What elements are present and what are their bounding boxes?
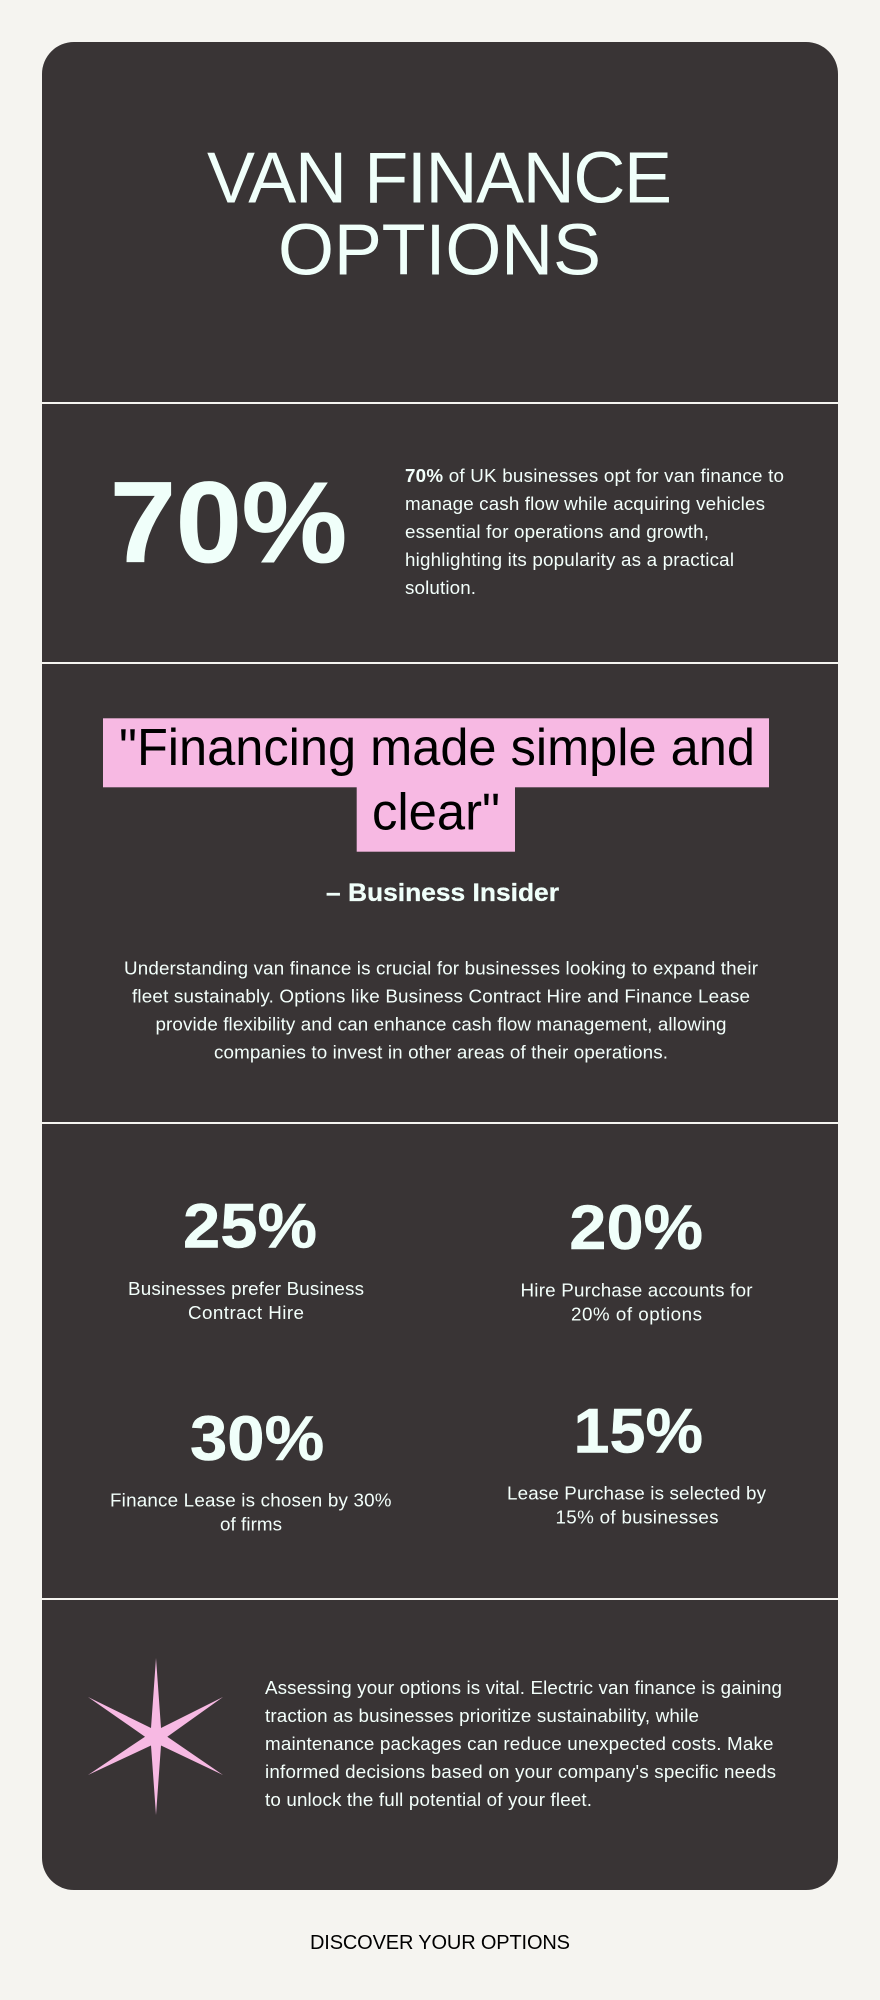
title — [207, 138, 672, 290]
text block: 70% description — [405, 465, 784, 598]
stat: 25%: Businesses prefer Business — [128, 1278, 364, 1299]
title: VAN FINANCE — [207, 138, 672, 218]
text block: understanding van finance: provide flexibility and can enhance cash flow management, allowing — [156, 1013, 726, 1034]
big stat: 70%: 70% — [110, 459, 347, 587]
text block: 70% description: solution. — [405, 577, 476, 598]
stat: 15%: Lease Purchase is selected by — [507, 1482, 767, 1504]
text block: assessing your options: maintenance packages can reduce unexpected costs. Make — [265, 1733, 774, 1754]
text block: assessing your options: to unlock the full potential of your fleet. — [265, 1789, 592, 1810]
text block: 70% description: essential for operations and growth, — [405, 521, 709, 542]
stat: 30%: 30% — [190, 1404, 324, 1474]
text block: understanding van finance: companies to invest in other areas of their operations. — [214, 1041, 668, 1062]
quote with pink highlight: "Financing made simple and — [119, 719, 755, 777]
text block: 70% description: highlighting its popularity as a practical — [405, 549, 734, 570]
text block: 70% description: manage cash flow while acquiring vehicles — [405, 493, 765, 514]
stat: 20% — [520, 1193, 752, 1324]
stat: 15%: 15% — [574, 1396, 703, 1466]
stat: 15%: 15% of businesses — [556, 1506, 718, 1528]
text block: assessing your options: informed decisions based on your company's specific needs — [265, 1761, 776, 1782]
quote source: – Business Insider — [326, 879, 559, 907]
stat: 30%: Finance Lease is chosen by 30% — [110, 1490, 392, 1510]
text block: assessing your options: Assessing your options is vital. Electric van finance is gaining — [265, 1677, 782, 1698]
stat: 25%: 25% — [183, 1192, 317, 1262]
text block: 70% description: 70% of UK businesses opt for van finance to — [405, 465, 784, 486]
stat: 25% — [128, 1192, 364, 1323]
icon: pink six-point star — [88, 1658, 223, 1815]
stat: 20%: Hire Purchase accounts for — [520, 1280, 752, 1300]
text block: understanding van finance: fleet sustainably. Options like Business Contract Hire and Finance Lease — [132, 985, 750, 1006]
stat: 25%: Contract Hire — [188, 1302, 304, 1323]
text block: understanding van finance — [124, 957, 758, 1062]
text block: assessing your options: traction as businesses prioritize sustainability, while — [265, 1705, 699, 1726]
quote with pink highlight: clear" — [372, 784, 500, 842]
quote with pink highlight — [103, 718, 769, 852]
footer call to action: DISCOVER YOUR OPTIONS — [310, 1932, 570, 1954]
stat: 30% — [110, 1404, 392, 1534]
stat: 30%: of firms — [220, 1514, 282, 1534]
text block: understanding van finance: Understanding van finance is crucial for businesses looking to expand their — [124, 957, 758, 978]
stat: 20%: 20% — [569, 1193, 703, 1263]
text block: assessing your options — [265, 1677, 782, 1810]
stat: 20%: 20% of options — [571, 1304, 702, 1324]
stat: 15% — [507, 1396, 767, 1528]
title: OPTIONS — [278, 210, 601, 290]
